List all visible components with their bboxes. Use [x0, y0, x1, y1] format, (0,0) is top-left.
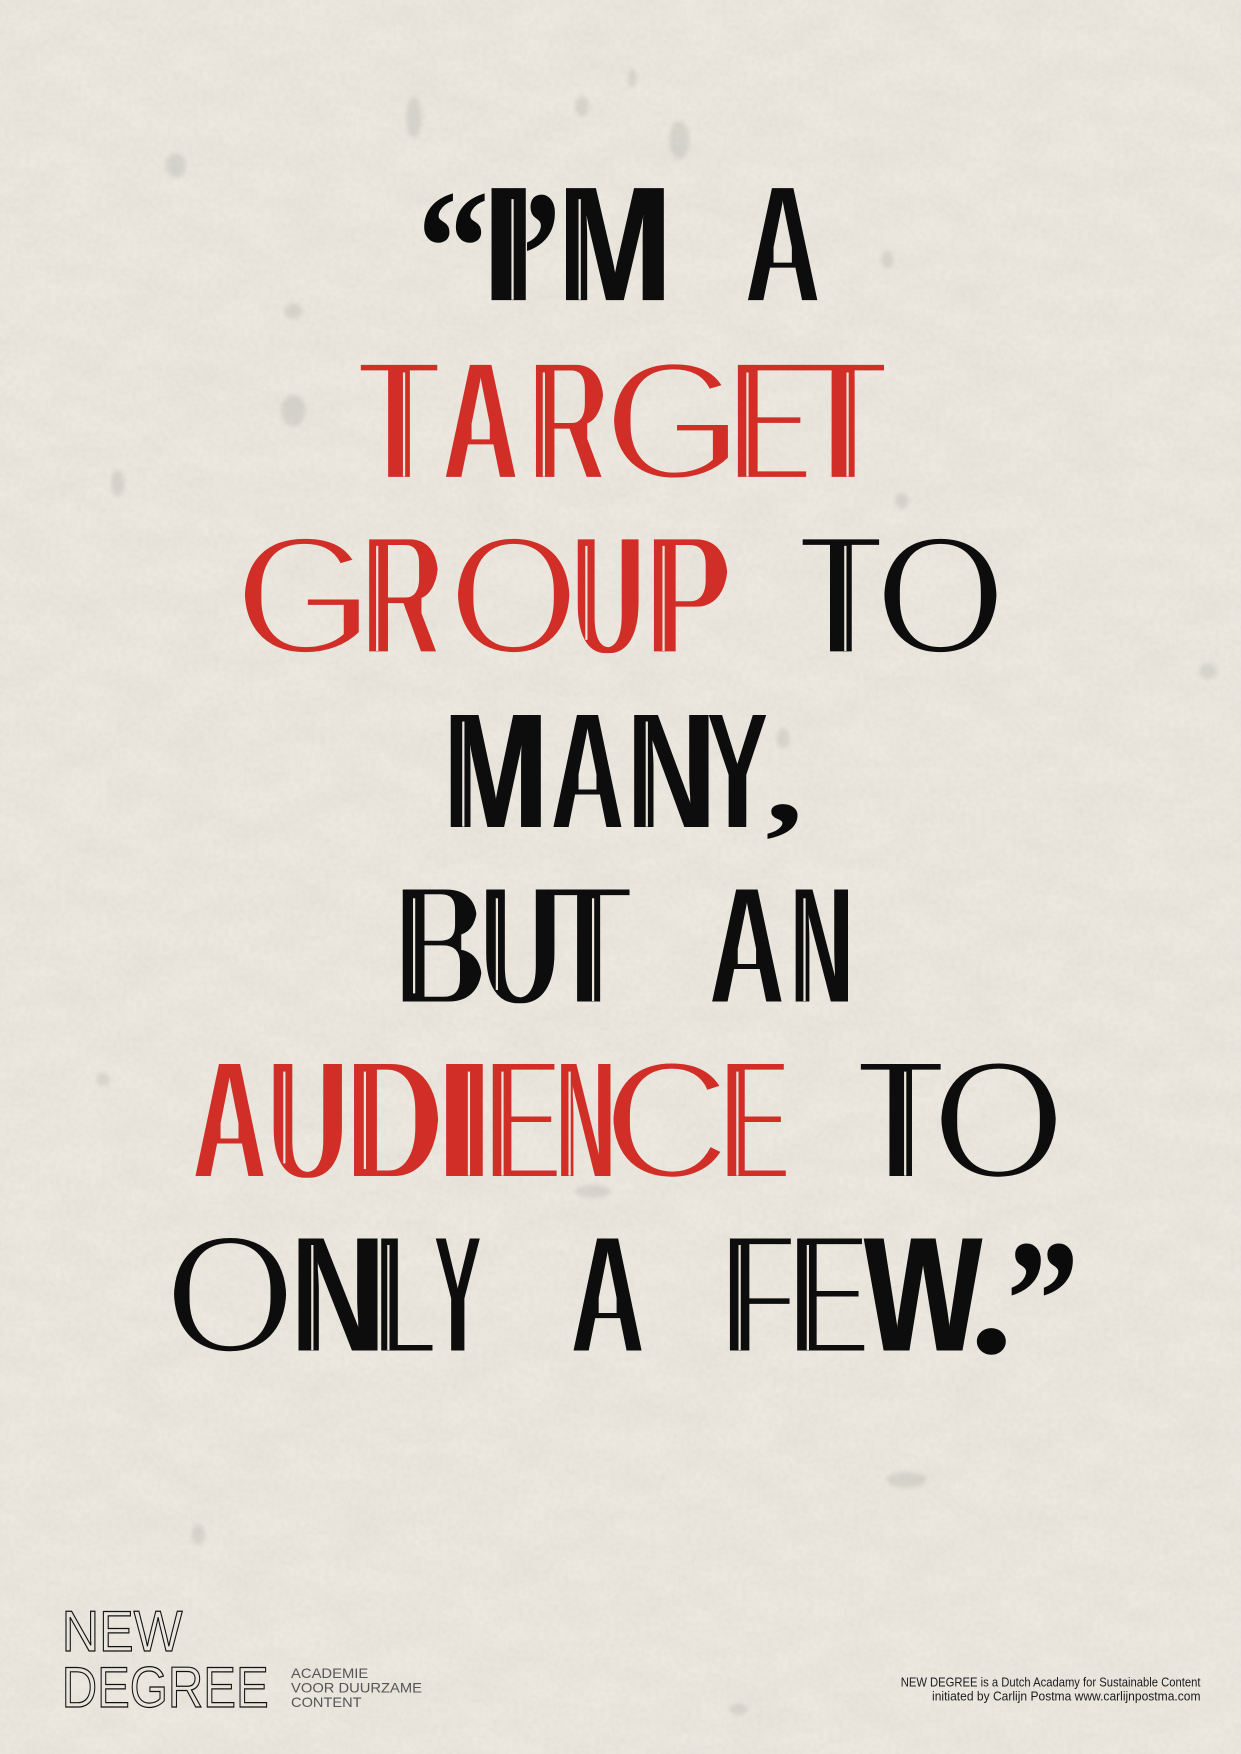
logo: New Degree: [62, 1600, 269, 1720]
line: ONLY A FEW.": A: [569, 1191, 646, 1397]
line: TARGET: E: [732, 317, 809, 524]
line: MANY,: A: [549, 668, 626, 874]
line: ONLY A FEW.": [166, 1190, 1079, 1398]
logo tagline: [291, 1665, 422, 1710]
line: ONLY A FEW.": ”: [1006, 1204, 1079, 1396]
line: AUDIENCE TO: A: [191, 1017, 268, 1223]
line: ONLY A FEW.": F: [724, 1191, 793, 1398]
line: TARGET: [361, 317, 883, 525]
logo: New Degree: DEGREE: [62, 1656, 269, 1720]
line: GROUP TO: G: [236, 500, 372, 691]
line: AUDIENCE TO: T: [861, 1016, 940, 1223]
line: GROUP TO: P: [648, 493, 730, 699]
line: GROUP TO: [236, 493, 1004, 699]
footer credit: [901, 1674, 1201, 1703]
line: BUT AN: B: [397, 843, 485, 1049]
line: GROUP TO: O: [876, 499, 1004, 691]
line: MANY,: M: [445, 669, 547, 875]
line: MANY,: Y: [703, 667, 771, 874]
line: ONLY A FEW.": N: [292, 1190, 384, 1398]
line: MANY,: ,: [766, 719, 803, 847]
logo tagline: ACADEMIE: [291, 1665, 368, 1681]
line: BUT AN: U: [481, 843, 560, 1049]
line: BUT AN: T: [548, 843, 629, 1049]
line: MANY,: [445, 667, 803, 875]
line: AUDIENCE TO: C: [604, 1025, 730, 1216]
line: "I'M A: M: [559, 142, 671, 348]
line: AUDIENCE TO: I: [435, 1018, 494, 1223]
line: ONLY A FEW.": E: [791, 1191, 867, 1398]
line: "I'M A: ’: [518, 152, 565, 360]
logo tagline: CONTENT: [291, 1694, 362, 1710]
line: GROUP TO: U: [573, 493, 643, 699]
line: ONLY A FEW.": W: [863, 1190, 983, 1398]
line: TARGET: G: [605, 325, 741, 517]
line: TARGET: A: [441, 319, 520, 525]
line: AUDIENCE TO: E: [487, 1018, 559, 1224]
line: GROUP TO: O: [450, 501, 577, 691]
line: AUDIENCE TO: E: [722, 1018, 788, 1223]
footer credit: initiated by Carlijn Postma www.carlijnpostma.com: [932, 1688, 1201, 1703]
line: BUT AN: A: [708, 843, 786, 1049]
line: TARGET: T: [803, 319, 883, 525]
line: ONLY A FEW.": .: [969, 1207, 1014, 1389]
line: "I'M A: A: [744, 142, 822, 348]
line: AUDIENCE TO: O: [933, 1025, 1064, 1215]
line: ONLY A FEW.": L: [376, 1192, 434, 1398]
line: "I'M A: [417, 142, 822, 360]
line: AUDIENCE TO: D: [347, 1016, 442, 1223]
line: BUT AN: N: [792, 843, 852, 1049]
line: "I'M A: “: [417, 158, 489, 338]
line: BUT AN: [397, 843, 852, 1049]
line: TARGET: T: [361, 318, 437, 524]
line: ONLY A FEW.": Y: [432, 1193, 484, 1398]
line: TARGET: R: [530, 317, 608, 523]
line: "I'M A: I: [481, 142, 536, 347]
footer credit: NEW DEGREE is a Dutch Acadamy for Sustainable Content: [901, 1674, 1201, 1689]
line: AUDIENCE TO: N: [557, 1018, 615, 1224]
line: GROUP TO: R: [363, 494, 443, 699]
line: MANY,: N: [628, 667, 715, 874]
logo tagline: VOOR DUURZAME: [291, 1679, 422, 1695]
line: AUDIENCE TO: U: [269, 1018, 347, 1224]
line: ONLY A FEW.": O: [166, 1199, 294, 1390]
quote text: [166, 142, 1079, 1398]
line: GROUP TO: T: [803, 493, 878, 699]
logo: New Degree: NEW: [62, 1600, 183, 1664]
line: AUDIENCE TO: [191, 1016, 1064, 1224]
